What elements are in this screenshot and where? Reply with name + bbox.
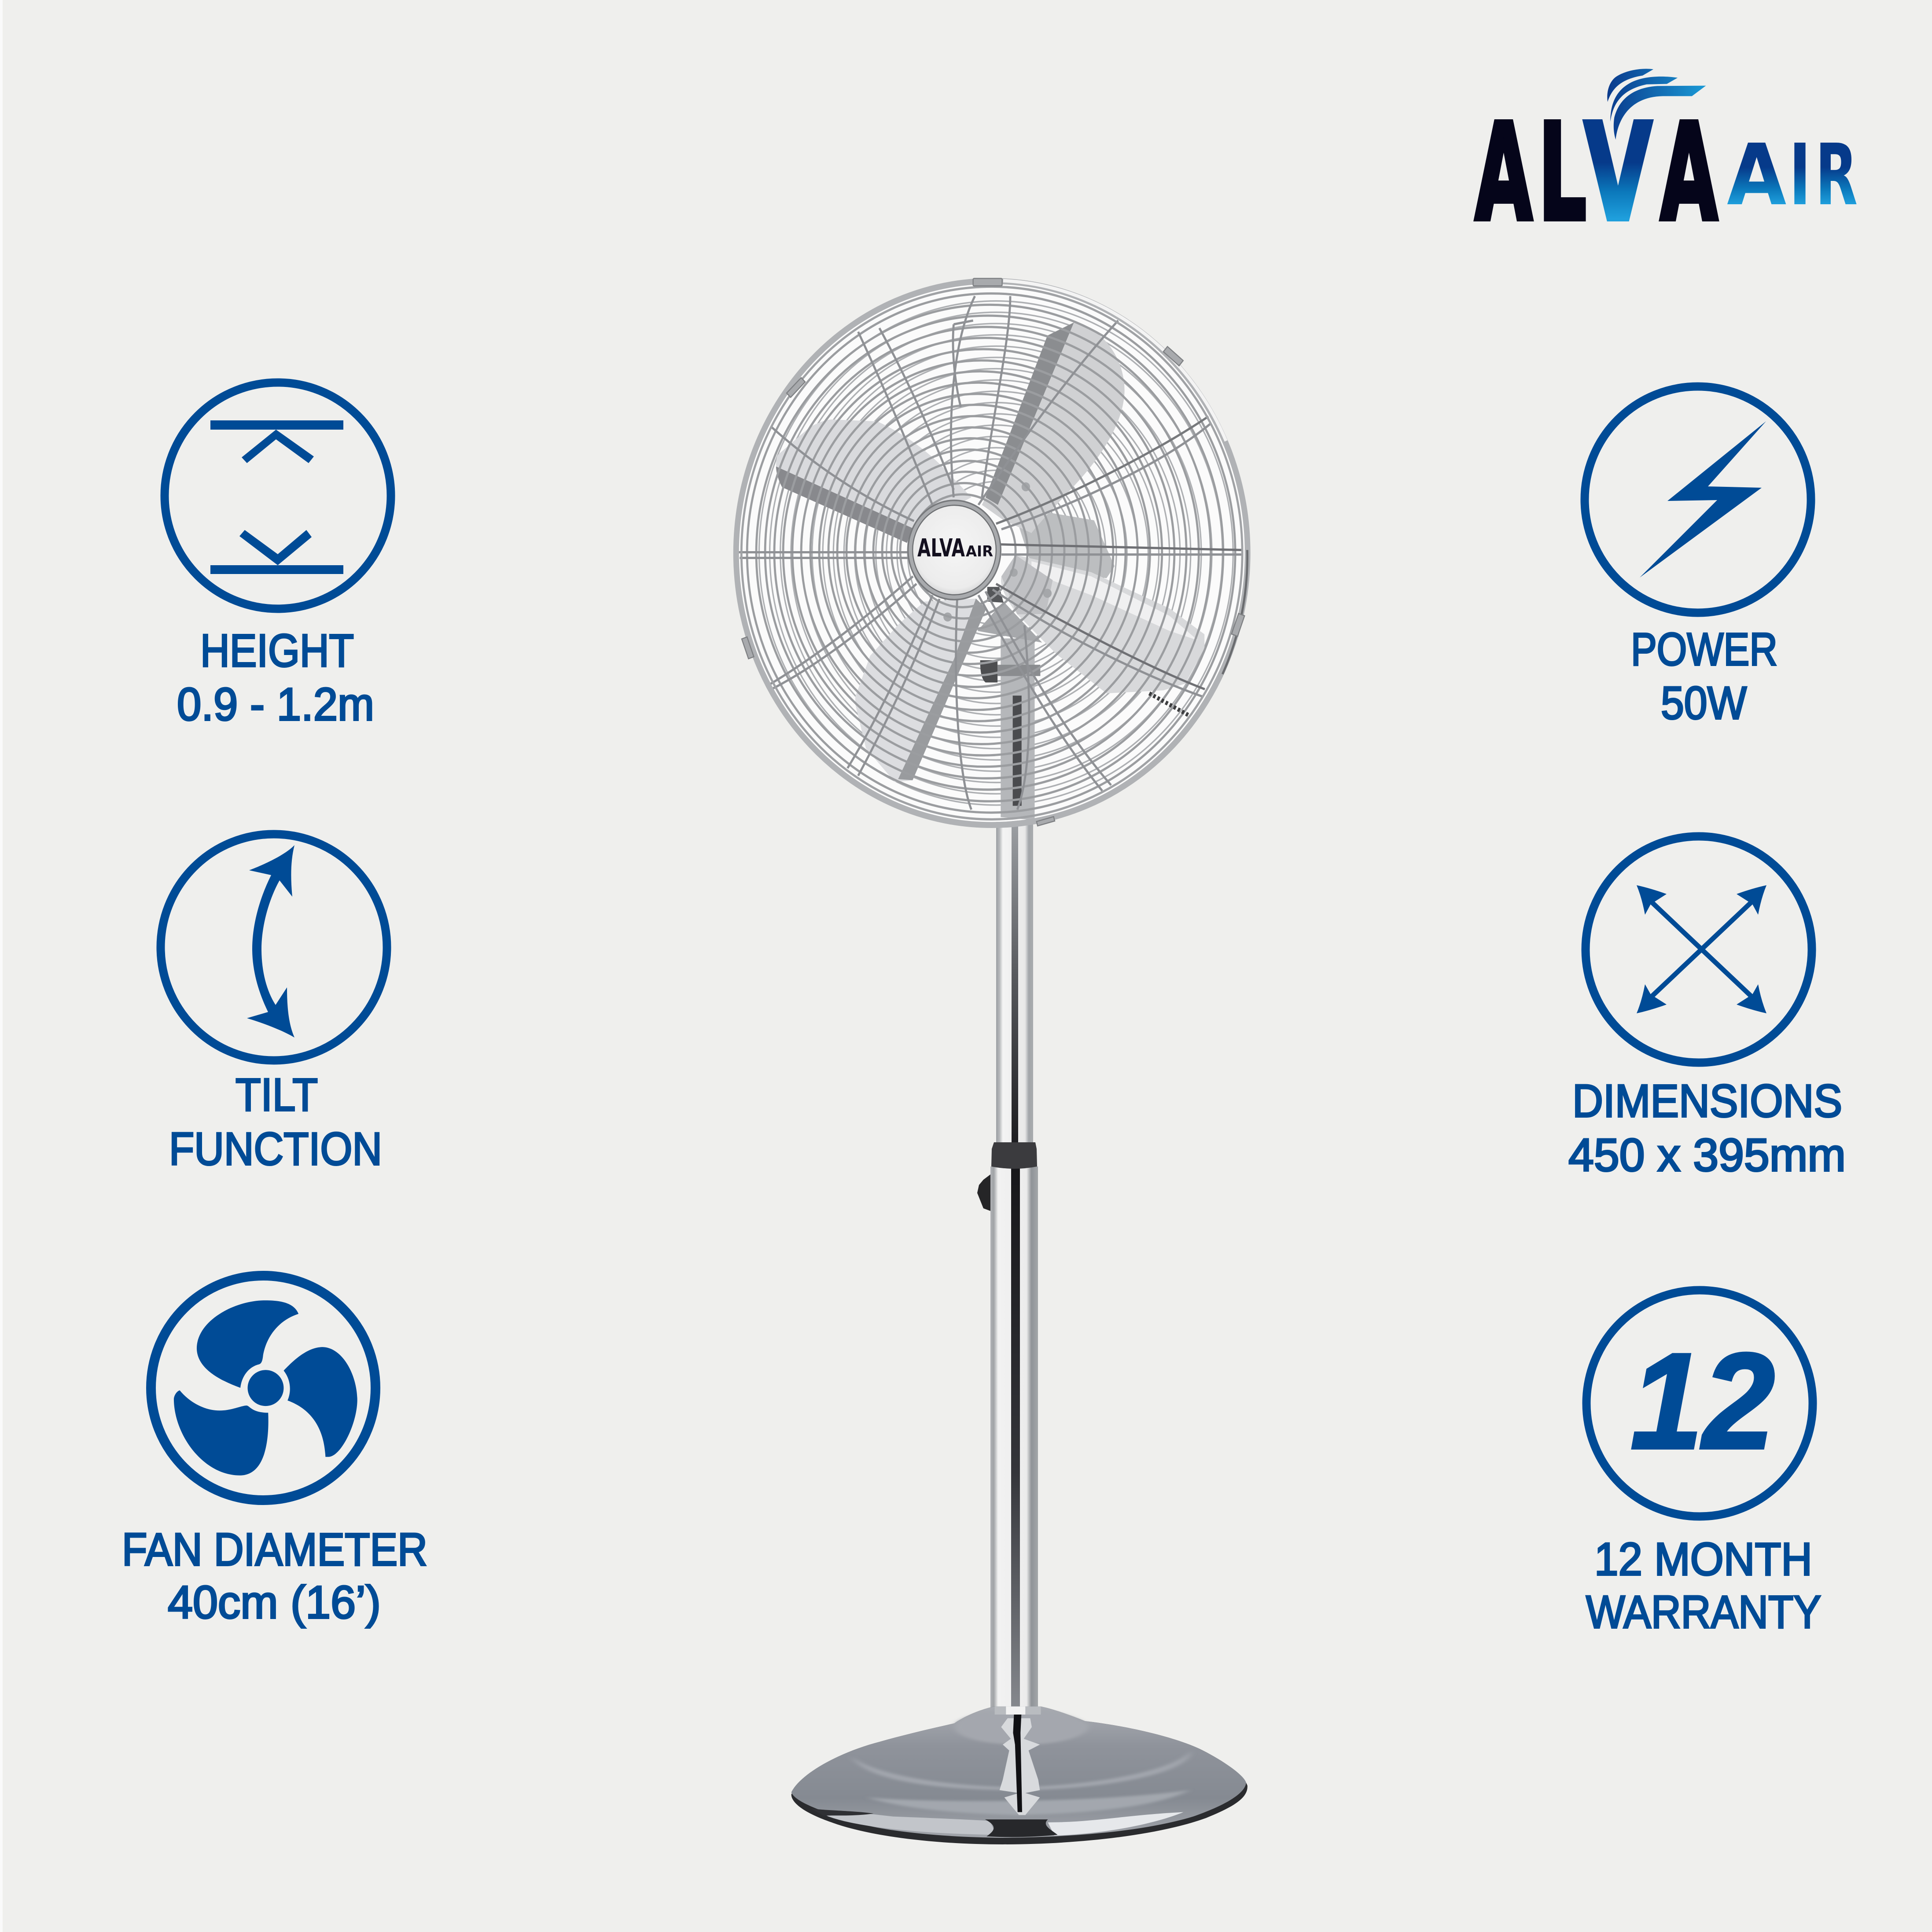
feature: tilt — [161, 834, 387, 1175]
fan head — [736, 278, 1248, 826]
label: dimensions: DIMENSIONS — [1572, 1075, 1842, 1127]
fan hub brand text: AIR — [966, 543, 993, 560]
label: warranty — [1586, 1534, 1821, 1638]
fan dark hatch — [1149, 693, 1189, 715]
feature: warranty — [1586, 1290, 1821, 1638]
product: pedestal fan — [736, 278, 1248, 1844]
label: tilt: FUNCTION — [169, 1123, 382, 1175]
label: height: HEIGHT — [200, 625, 354, 677]
fan base — [791, 1707, 1248, 1844]
label: power — [1631, 624, 1777, 729]
icon: fan — [151, 1276, 375, 1500]
label: height: 0.9 - 1.2m — [177, 679, 374, 730]
icon: 12 month badge: 12 — [1630, 1325, 1775, 1477]
fan motor and neck — [977, 506, 1115, 820]
icon: lightning bolt — [1585, 386, 1811, 613]
logo wordmark ALVA: L — [1538, 95, 1586, 250]
logo wordmark ALVA: V — [1584, 96, 1652, 250]
fan blade: lower left — [855, 599, 986, 782]
fan rim — [736, 281, 1248, 825]
fan blade: upper right — [982, 322, 1125, 533]
logo wordmark ALVA: A — [1475, 95, 1532, 250]
logo wordmark AIR — [1727, 126, 1858, 224]
icon: dimensions arrows — [1586, 836, 1812, 1063]
label: height — [177, 625, 374, 730]
label: power: POWER — [1631, 624, 1777, 675]
logo wordmark AIR: R — [1815, 126, 1858, 224]
label: fan diameter: 40cm (16’) — [168, 1577, 381, 1628]
fan blade: lower right — [1001, 555, 1204, 693]
logo wordmark ALVA — [1475, 95, 1718, 250]
label: tilt: TILT — [236, 1069, 318, 1121]
label: warranty: WARRANTY — [1586, 1586, 1821, 1638]
fan grille spokes — [738, 296, 1242, 810]
logo wordmark AIR: I — [1789, 126, 1811, 224]
fan height knob — [977, 1174, 990, 1211]
feature: fan diameter — [122, 1276, 427, 1628]
label: dimensions: 450 x 395mm — [1568, 1130, 1846, 1181]
feature: height — [165, 383, 391, 730]
logo wordmark ALVA: A — [1660, 95, 1718, 250]
fan front cage rings — [747, 294, 1235, 813]
fan cage interior — [739, 284, 1245, 822]
fan back cage rings — [759, 301, 1233, 805]
label: warranty: 12 MONTH — [1594, 1534, 1812, 1585]
logo wordmark AIR: A — [1727, 126, 1786, 224]
fan hub brand text: ALVA — [917, 534, 965, 563]
feature: power — [1585, 386, 1811, 729]
feature: dimensions — [1568, 836, 1846, 1181]
icon: 12 month badge — [1586, 1290, 1813, 1516]
fan pole upper — [996, 814, 1033, 1144]
icon: height — [165, 383, 391, 609]
logo swoosh — [1607, 69, 1706, 140]
fan rim clips — [742, 278, 1244, 826]
fan pole lower — [990, 1167, 1038, 1726]
logo: Alva Air — [1475, 69, 1858, 250]
label: tilt — [169, 1069, 382, 1175]
label: power: 50W — [1661, 677, 1747, 729]
fan blade: left — [776, 420, 972, 543]
label: dimensions — [1568, 1075, 1846, 1181]
label: fan diameter — [122, 1524, 427, 1628]
fan height collar — [991, 1142, 1037, 1169]
label: fan diameter: FAN DIAMETER — [122, 1524, 427, 1575]
fan hub — [908, 500, 1001, 600]
icon: tilt — [161, 834, 387, 1060]
